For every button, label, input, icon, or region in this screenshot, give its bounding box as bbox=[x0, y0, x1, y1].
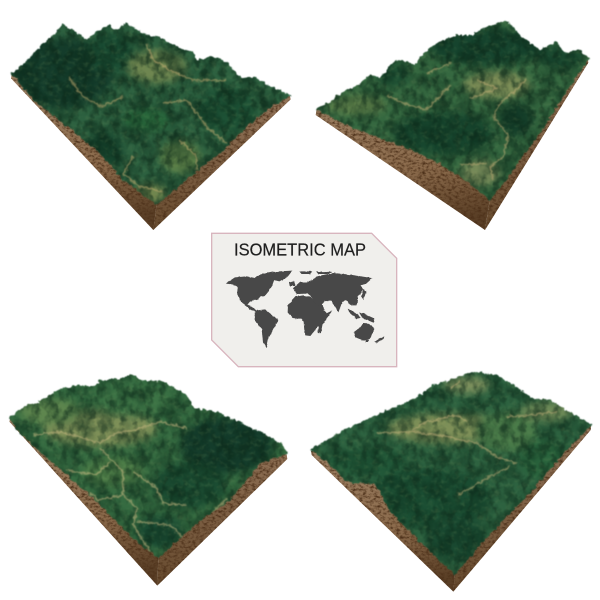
left soil cliff bbox=[311, 442, 455, 592]
valley roads bbox=[377, 382, 557, 495]
forested surface bbox=[10, 22, 292, 205]
valley roads bbox=[68, 43, 227, 192]
forested surface bbox=[310, 370, 593, 576]
forested surface bbox=[8, 374, 288, 558]
terrain block: bottom right bbox=[300, 365, 600, 595]
right soil cliff bbox=[453, 60, 588, 230]
right soil cliff bbox=[151, 96, 291, 230]
left soil cliff bbox=[11, 73, 157, 230]
terrain block: bottom left bbox=[8, 374, 288, 586]
terrain block: top left bbox=[10, 22, 292, 230]
world map bbox=[227, 271, 383, 347]
left soil cliff bbox=[9, 418, 158, 586]
valley roads bbox=[387, 63, 527, 180]
left soil cliff bbox=[316, 83, 490, 230]
card background bbox=[212, 233, 397, 367]
right soil cliff bbox=[452, 426, 591, 592]
forested surface bbox=[315, 20, 591, 202]
heading: ISOMETRIC MAP bbox=[234, 240, 366, 260]
valley roads bbox=[33, 422, 227, 552]
right soil cliff bbox=[150, 435, 287, 586]
panel: isometric map card bbox=[212, 233, 397, 367]
terrain block: top right bbox=[315, 20, 591, 230]
